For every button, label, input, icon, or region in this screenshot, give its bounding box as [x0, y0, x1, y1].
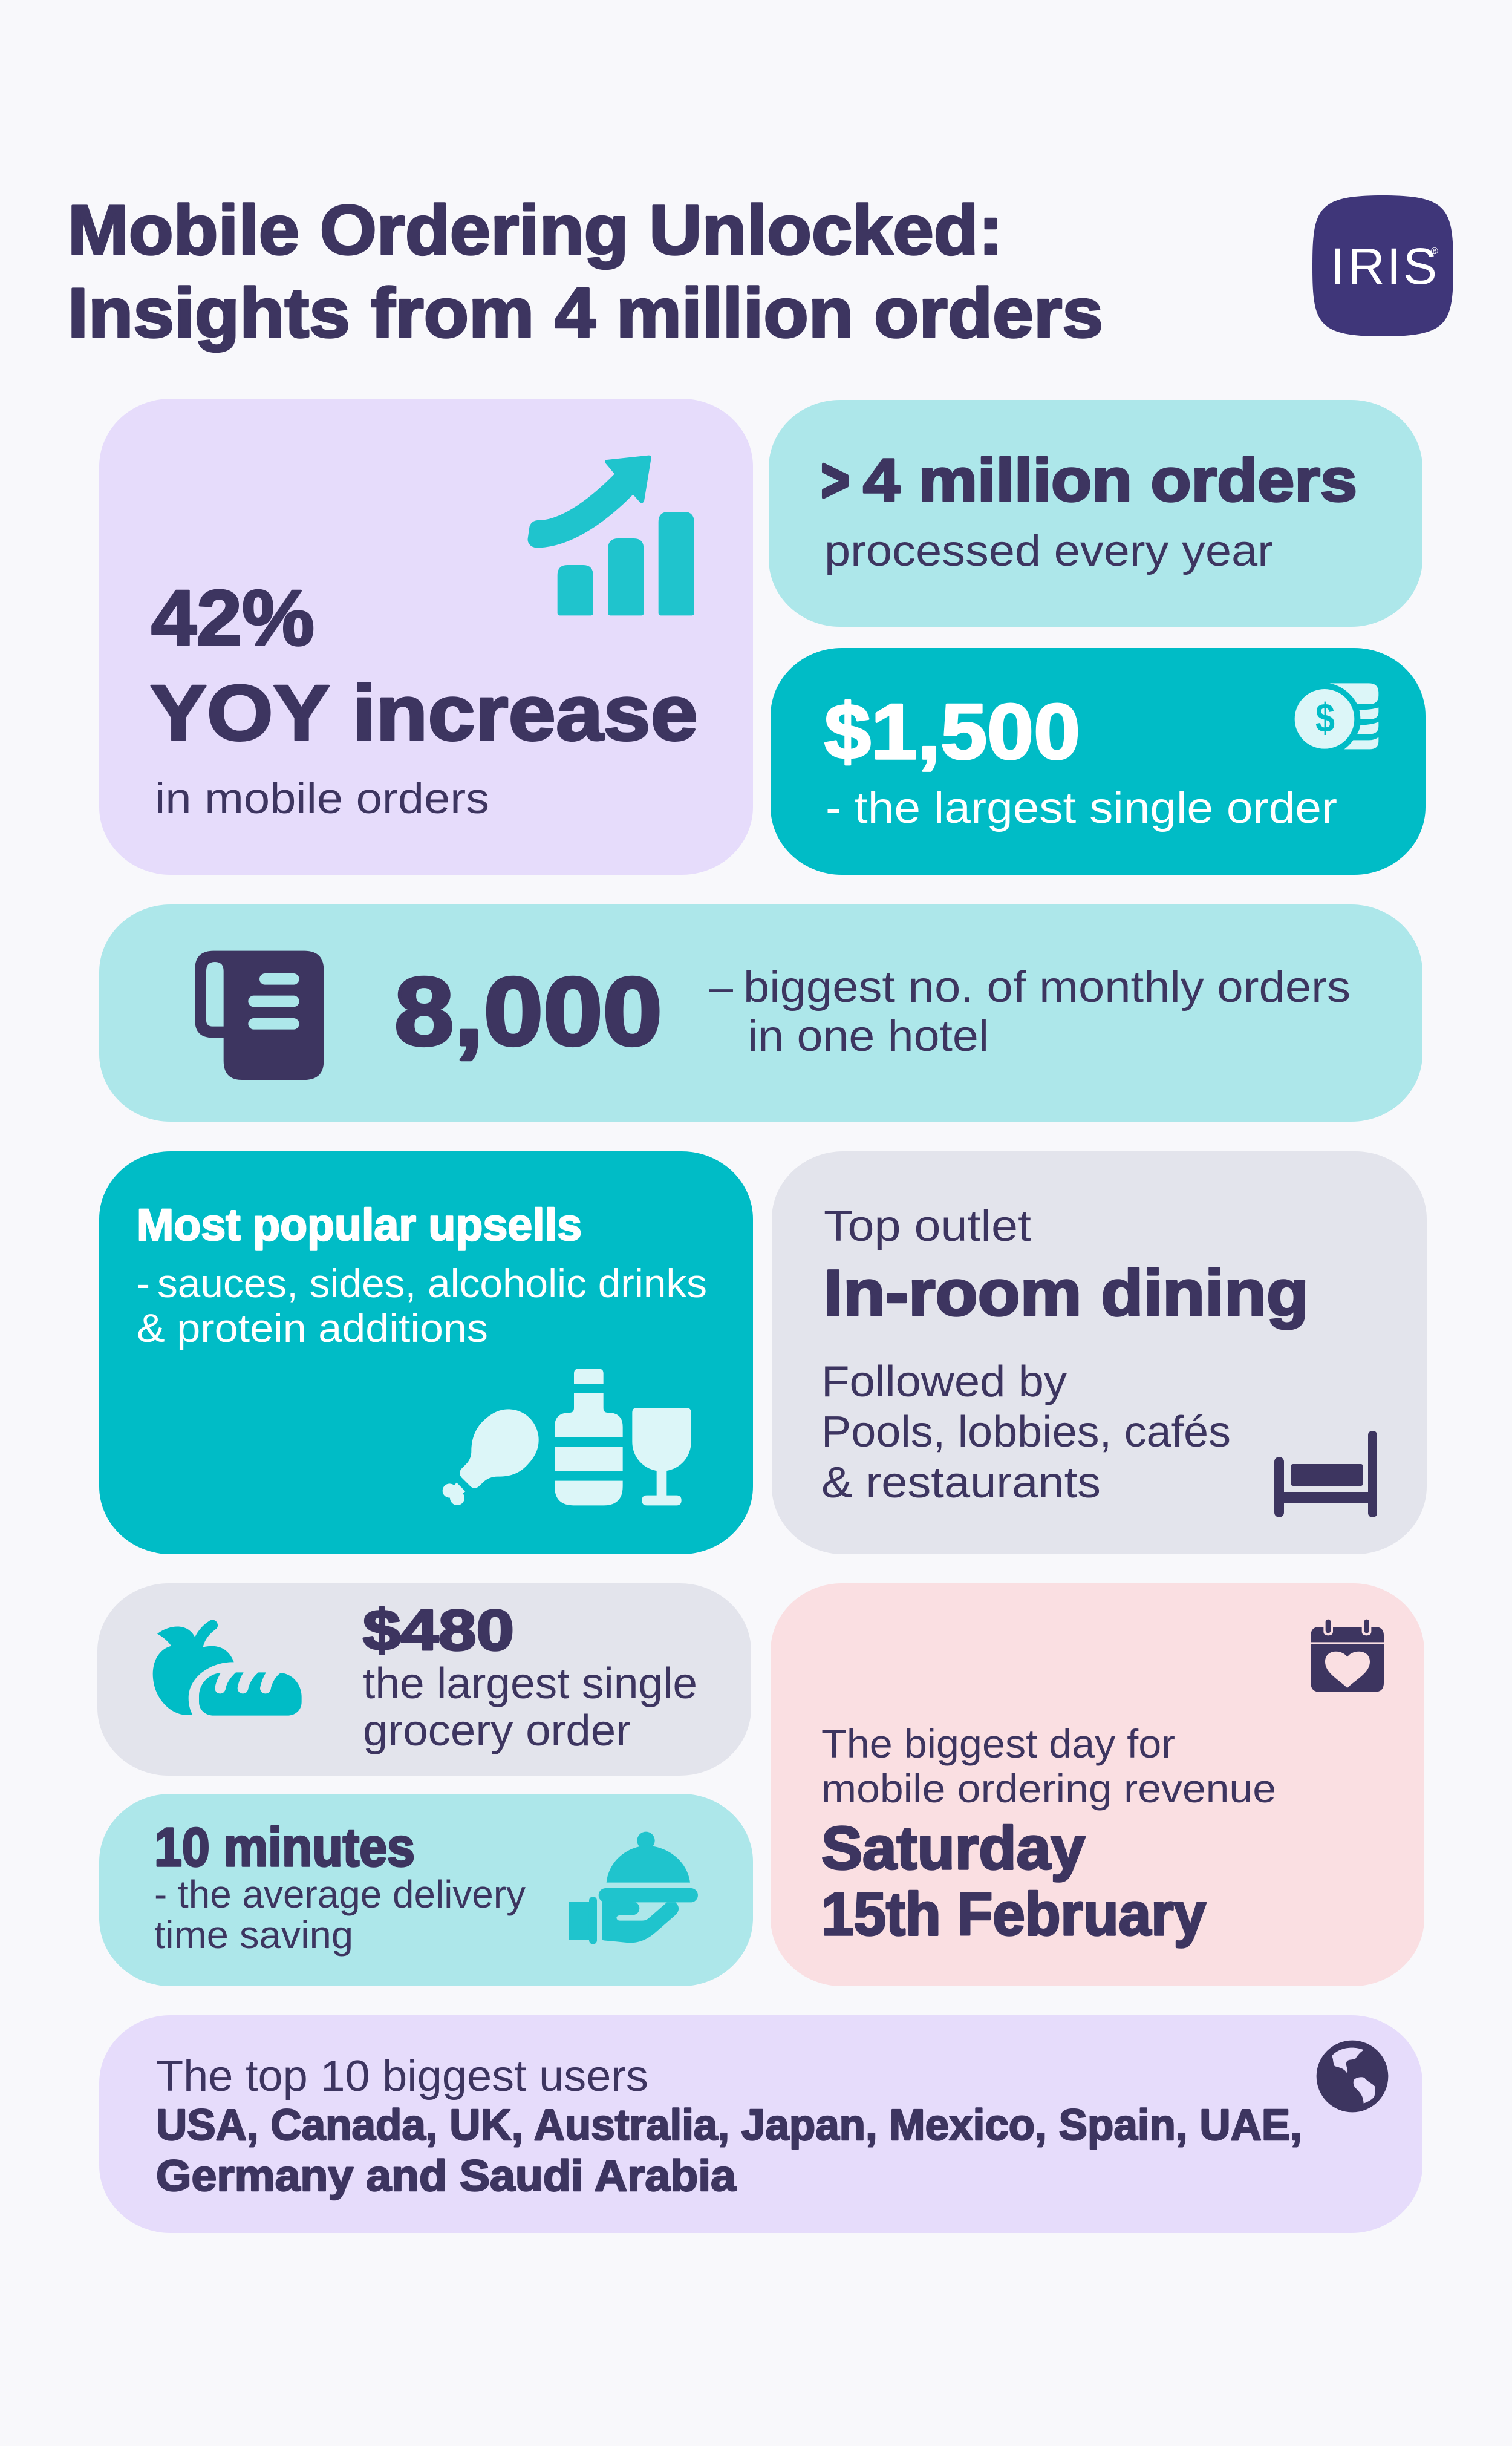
text: followed by: & restaurants: [821, 1459, 1101, 1507]
icon: globe: [1317, 2041, 1388, 2112]
stat: 8,000: 8,000: [394, 957, 662, 1065]
caption: average delivery time saving: time saving: [154, 1913, 353, 1957]
panel: top 10 biggest users: [99, 2015, 1422, 2233]
text: upsell list: [137, 1261, 707, 1350]
caption: processed every year: processed every year: [824, 527, 1273, 575]
text: the top 10 biggest users: The top 10 biggest users: [156, 2052, 648, 2101]
text: upsell list: & protein additions: [137, 1306, 488, 1350]
heading: in-room dining: In-room dining: [824, 1256, 1309, 1329]
heading: Saturday 15th February: 15th February: [821, 1880, 1206, 1948]
caption: largest single grocery order: [363, 1660, 697, 1755]
icon: hand holding cloche: [569, 1832, 698, 1944]
icon: coins: $: [1315, 695, 1335, 741]
chevron: >: [821, 446, 849, 514]
panel: 42% YOY increase: [99, 399, 753, 875]
heading: YOY increase: YOY increase: [150, 669, 698, 757]
text: top outlet: Top outlet: [824, 1202, 1031, 1251]
panel: $1,500 largest single order: [771, 648, 1426, 875]
text: biggest day for mobile ordering revenue: [821, 1721, 1276, 1811]
text: country list: USA, Canada, UK, Australia, Japan, Mexico, Spain, UAE,: [156, 2101, 1302, 2150]
text: biggest day for mobile ordering revenue: mobile ordering revenue: [821, 1766, 1276, 1811]
icon: drumstick, bottle and glass: [443, 1369, 691, 1505]
caption: average delivery time saving: - the average delivery: [154, 1872, 526, 1916]
icon: coins: [1295, 683, 1378, 749]
caption: biggest number of monthly orders: biggest no. of monthly orders: [743, 963, 1351, 1012]
stat: $480: $480: [363, 1598, 514, 1663]
text: upsell list: -: [137, 1261, 150, 1306]
stat: 42%: 42%: [151, 574, 314, 662]
panel: $480 grocery order: [97, 1583, 751, 1776]
stat: 10 minutes: 10 minutes: [154, 1817, 415, 1878]
heading: Saturday 15th February: Saturday: [821, 1814, 1085, 1882]
icon: calendar with heart: [1311, 1620, 1384, 1692]
text: biggest day for mobile ordering revenue: The biggest day for: [821, 1721, 1175, 1766]
text: followed by: Pools, lobbies, cafés: [821, 1408, 1231, 1456]
panel: top outlet: [772, 1151, 1427, 1554]
caption: largest single grocery order: grocery order: [363, 1707, 631, 1755]
panel: 10 minutes delivery saving: [99, 1794, 753, 1986]
title: Insights from 4 million orders: [68, 273, 1103, 352]
caption: biggest number of monthly orders: –: [709, 963, 734, 1012]
panel: 4 million orders: [769, 400, 1422, 627]
icon: rising bar chart with arrow: [528, 456, 694, 615]
title: [68, 191, 1103, 352]
caption: largest single grocery order: the largest single: [363, 1660, 697, 1708]
heading: 4 million orders: 4 million orders: [863, 446, 1357, 514]
heading: Saturday 15th February: [821, 1814, 1206, 1948]
heading: most popular upsells: Most popular upsells: [137, 1200, 582, 1250]
logo: IRIS: ®: [1431, 246, 1438, 257]
caption: biggest number of monthly orders: in one hotel: [748, 1012, 989, 1061]
icon: receipt menu: [195, 951, 324, 1080]
icon: apple and bread: [153, 1620, 302, 1716]
caption: the largest single order: - the largest single order: [826, 784, 1337, 832]
text: country list: Germany and Saudi Arabia: [156, 2152, 737, 2200]
panel: biggest day: [771, 1583, 1424, 1986]
title: Mobile Ordering Unlocked:: [68, 191, 1003, 269]
panel: 8,000 monthly orders: [99, 904, 1422, 1122]
panel: most popular upsells: [99, 1151, 753, 1554]
caption: average delivery time saving: [154, 1872, 526, 1957]
stat: $1,500: $1,500: [824, 687, 1080, 776]
text: country list: [156, 2101, 1302, 2200]
caption: biggest number of monthly orders: [709, 963, 1351, 1061]
caption: in mobile orders: in mobile orders: [155, 775, 489, 823]
text: upsell list: sauces, sides, alcoholic drinks: [157, 1261, 707, 1306]
icon: bed: [1274, 1431, 1377, 1517]
logo: IRIS: IRIS: [1331, 238, 1437, 295]
logo: IRIS: [1312, 195, 1453, 336]
text: followed by: Followed by: [821, 1358, 1067, 1406]
text: followed by: [821, 1358, 1231, 1507]
